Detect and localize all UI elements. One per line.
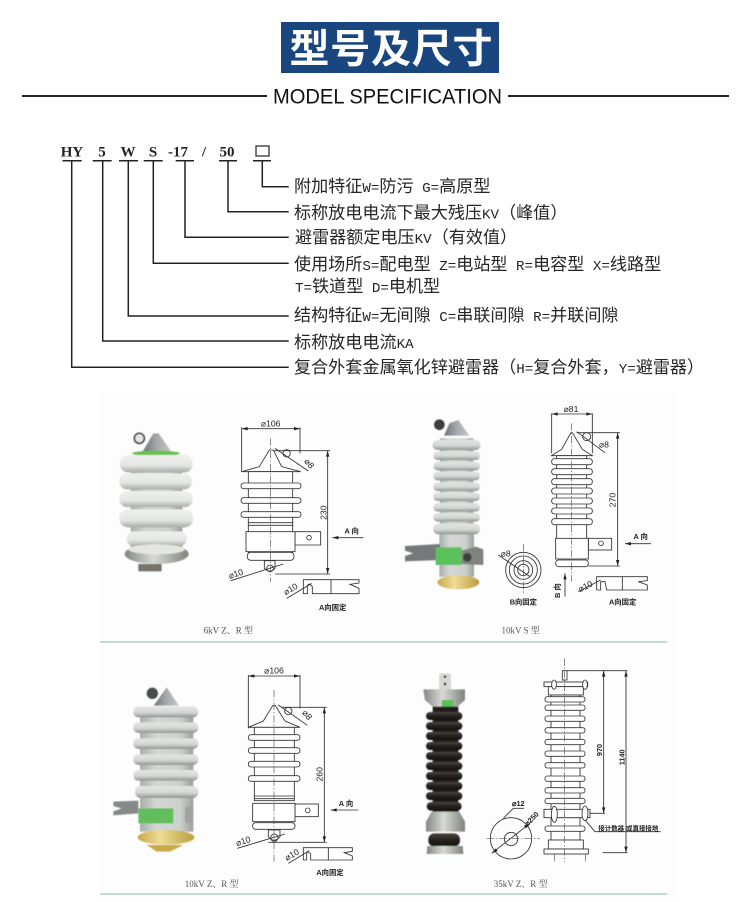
subtitle with rules: MODEL SPECIFICATION [273, 86, 502, 108]
model code explanations: 复合外套金属氧化锌避雷器（H=复合外套，Y=避雷器） [294, 358, 704, 379]
model code letters: / [201, 144, 207, 160]
drawing: 10kV S dimensions: ⌀8 [501, 549, 511, 559]
drawing: 10kV Z R dimensions: ⌀8 [300, 708, 314, 722]
drawing: 10kV S dimensions: ⌀81 [564, 404, 579, 414]
leader lines [62, 161, 289, 367]
drawing: 6kV dimensions [227, 418, 363, 612]
model code letters: W [120, 144, 136, 160]
drawing: 10kV Z R dimensions: ⌀10 [283, 847, 301, 863]
drawing: 10kV Z R dimensions: ⌀106 [264, 666, 284, 676]
panel: 35kV Z R type [423, 658, 661, 889]
drawing: 10kV Z R dimensions: A 向 [339, 799, 353, 808]
panel: 10kV S type [405, 404, 651, 636]
caption: 6kV: 6kV Z、R 型 [204, 625, 253, 636]
model code diagram [61, 144, 704, 379]
product image background [101, 392, 675, 900]
drawing: 10kV Z R dimensions: 260 [315, 767, 325, 782]
drawing: 6kV dimensions: A向固定 [319, 603, 347, 612]
drawing: 6kV dimensions: ⌀10 [282, 581, 300, 597]
model code explanations: T=铁道型 D=电机型 [295, 277, 440, 298]
drawing: 10kV Z R dimensions: A向固定 [316, 868, 344, 877]
divider: upper row [100, 641, 667, 643]
drawing: 10kV S dimensions [498, 404, 651, 607]
drawing: 10kV S dimensions: B 向 [553, 583, 562, 598]
model code explanations: 附加特征W=防污 G=高原型 [294, 177, 490, 198]
divider: lower row [100, 893, 667, 895]
drawing: 6kV dimensions: A 向 [344, 526, 359, 535]
model code explanations: 使用场所S=配电型 Z=电站型 R=电容型 X=线路型 [294, 254, 661, 276]
panel: 10kV Z R type [113, 666, 358, 889]
drawing: 10kV S dimensions: 270 [608, 493, 618, 507]
drawing: 35kV dimensions: ⌀12 [512, 799, 525, 808]
model code letters: -17 [168, 144, 188, 160]
photo: 10kV Z R arrester [113, 687, 198, 852]
caption: 10kV S: 10kV S 型 [502, 625, 540, 636]
model code letters: 5 [98, 144, 106, 160]
drawing: 35kV dimensions: 接计数器 或直接接地 [598, 824, 659, 833]
drawing: 6kV dimensions: ⌀10 [227, 567, 245, 581]
model code explanations: 标称放电电流下最大残压KV（峰值） [294, 204, 567, 224]
drawing: 6kV dimensions: 230 [319, 505, 329, 520]
drawing: 35kV dimensions [487, 658, 661, 862]
model code explanations: 结构特征W=无间隙 C=串联间隙 R=并联间隙 [294, 306, 619, 327]
drawing: 10kV S dimensions: B向固定 [510, 598, 538, 607]
model code letters: 50 [220, 144, 234, 160]
photo: 10kV S arrester [405, 419, 483, 589]
model code letters: HY [61, 144, 83, 160]
drawing: 10kV S dimensions: ⌀10 [576, 578, 594, 594]
model code explanations [294, 177, 704, 379]
drawing: 10kV S dimensions: A向固定 [609, 598, 637, 607]
panel: 6kV Z R type [119, 418, 363, 636]
drawing: 6kV dimensions: ⌀8 [302, 456, 316, 471]
drawing: 35kV dimensions: ⌀250 [522, 810, 541, 828]
model code letters: S [149, 144, 157, 160]
drawing: 35kV dimensions: 1140 [618, 749, 627, 765]
drawing: 10kV S dimensions: ⌀8 [599, 439, 609, 449]
photo: 6kV arrester [119, 433, 193, 571]
drawing: 10kV S dimensions: A 向 [633, 532, 648, 541]
caption: 10kV Z R: 10kV Z、R 型 [185, 878, 239, 889]
model code explanations: 标称放电电流KA [294, 333, 414, 354]
model code letters [61, 144, 269, 160]
drawing: 10kV Z R dimensions [235, 666, 358, 877]
drawing: 6kV dimensions: ⌀106 [261, 418, 281, 428]
caption: 35kV Z R: 35kV Z、R 型 [494, 878, 548, 889]
photo: 35kV arrester [423, 673, 465, 854]
title banner: 型号及尺寸 [290, 28, 492, 72]
drawing: 10kV Z R dimensions: ⌀10 [235, 834, 252, 848]
model code explanations: 避雷器额定电压KV（有效值） [295, 228, 517, 249]
drawing: 35kV dimensions: 970 [595, 744, 604, 756]
